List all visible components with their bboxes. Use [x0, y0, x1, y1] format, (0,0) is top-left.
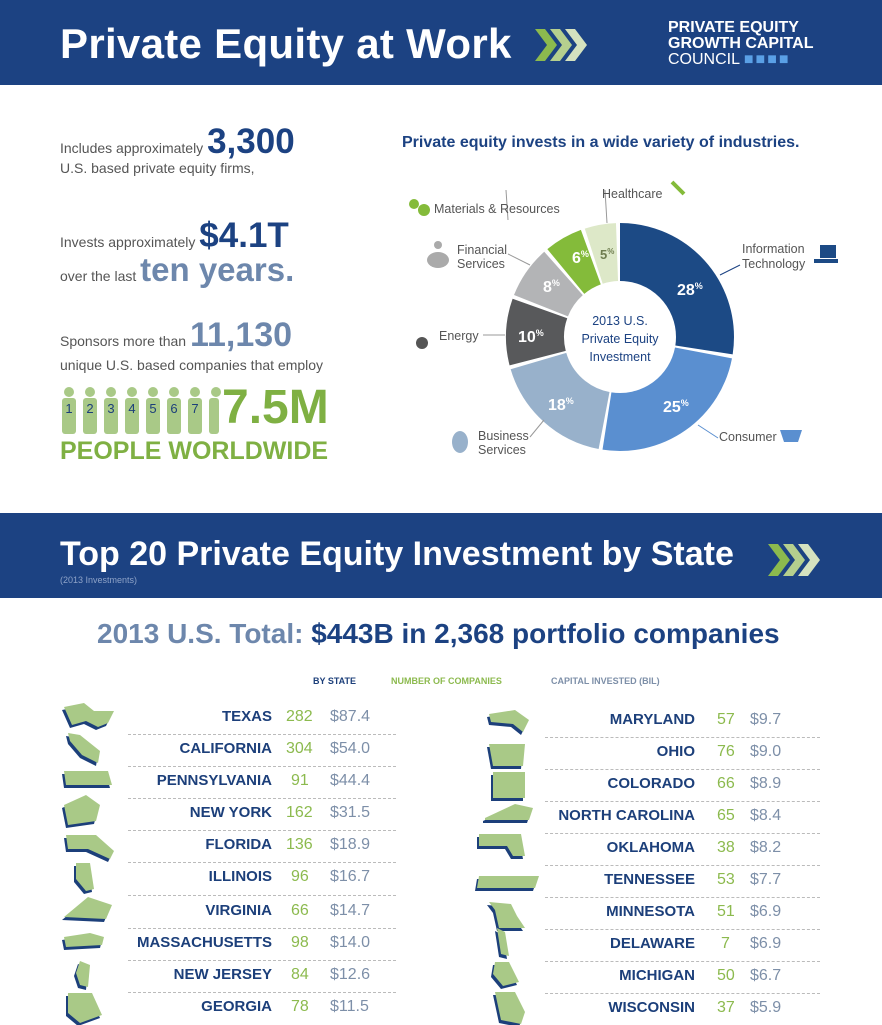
table right: $7.7: [750, 871, 781, 888]
donut chart: 18: [548, 397, 566, 414]
donut chart: Information: [742, 242, 805, 256]
table right: TENNESSEE: [604, 871, 695, 888]
table left: [128, 708, 396, 1015]
donut chart: %: [536, 328, 544, 338]
donut chart: [409, 180, 838, 457]
donut chart: Private Equity: [581, 332, 659, 346]
table left: VIRGINIA: [205, 902, 272, 919]
icon: people row: 4: [128, 401, 136, 416]
text: people worldwide: PEOPLE WORLDWIDE: [60, 437, 328, 465]
table left: MASSACHUSETTS: [137, 934, 272, 951]
table left: NEW YORK: [190, 804, 272, 821]
donut chart: 25: [663, 399, 681, 416]
table right: 51: [717, 903, 735, 920]
table right: $9.7: [750, 711, 781, 728]
stat: 7.5M: 7.5M: [222, 381, 329, 434]
title: Private Equity at Work: [60, 20, 512, 67]
table right: MARYLAND: [610, 711, 695, 728]
table left: 98: [291, 934, 309, 951]
table left: 96: [291, 868, 309, 885]
stat: firms: Includes approximately 3,300: [60, 122, 295, 161]
table left: 84: [291, 966, 309, 983]
table left: 91: [291, 772, 309, 789]
table right: NORTH CAROLINA: [558, 807, 695, 824]
column headers: BY STATE: [313, 676, 356, 686]
table right: $8.2: [750, 839, 781, 856]
donut chart: Financial: [457, 243, 507, 257]
column headers: CAPITAL INVESTED (BIL): [551, 676, 660, 686]
donut chart: 10: [518, 329, 536, 346]
table left: PENNSYLVANIA: [157, 772, 272, 789]
donut chart: Healthcare: [602, 187, 662, 201]
table left: ILLINOIS: [209, 868, 272, 885]
donut chart: 28: [677, 282, 695, 299]
table left: TEXAS: [222, 708, 272, 725]
table right: 53: [717, 871, 735, 888]
icon: chevrons: [535, 29, 587, 61]
donut chart: Services: [457, 257, 505, 271]
stat: firms: U.S. based private equity firms,: [60, 160, 255, 176]
subtitle: (2013 Investments): [60, 575, 137, 585]
donut chart: 5: [600, 247, 607, 262]
icon: people row: 6: [170, 401, 178, 416]
logo: GROWTH CAPITAL: [668, 35, 813, 52]
donut chart: %: [552, 278, 560, 288]
table right: WISCONSIN: [608, 999, 695, 1016]
donut chart: %: [581, 249, 589, 259]
table right: $6.9: [750, 903, 781, 920]
table right: $8.4: [750, 807, 781, 824]
column headers: [313, 676, 660, 686]
table right: 76: [717, 743, 735, 760]
table right: OKLAHOMA: [607, 839, 695, 856]
table right: DELAWARE: [610, 935, 695, 952]
table right: 50: [717, 967, 735, 984]
donut chart: Technology: [742, 257, 806, 271]
chart heading: Private equity invests in a wide variety of industries.: [402, 134, 799, 151]
logo: [668, 19, 814, 68]
table left: $87.4: [330, 708, 370, 725]
icon: people row: 2: [86, 401, 94, 416]
table left: CALIFORNIA: [180, 740, 272, 757]
donut chart: %: [695, 281, 703, 291]
donut chart: Consumer: [719, 430, 777, 444]
table left: 136: [286, 836, 313, 853]
table right: 66: [717, 775, 735, 792]
table left: 66: [291, 902, 309, 919]
table left: $18.9: [330, 836, 370, 853]
stat: companies: unique U.S. based companies that employ: [60, 357, 323, 373]
table right: $6.9: [750, 935, 781, 952]
state icons left: [62, 703, 114, 1025]
table right: OHIO: [657, 743, 695, 760]
table right: 65: [717, 807, 735, 824]
stat: companies: [60, 316, 323, 373]
icon: people row: 5: [149, 401, 157, 416]
donut chart: Investment: [589, 350, 651, 364]
table left: 162: [286, 804, 313, 821]
table left: $31.5: [330, 804, 370, 821]
table left: 282: [286, 708, 313, 725]
donut chart: 6: [572, 250, 581, 267]
table left: NEW JERSEY: [174, 966, 272, 983]
table right: $8.9: [750, 775, 781, 792]
table left: $44.4: [330, 772, 370, 789]
icon: chevrons: [768, 544, 820, 576]
total heading: 2013 U.S. Total: $443B in 2,368 portfolio companies: [97, 618, 780, 649]
donut chart: %: [681, 398, 689, 408]
table left: $12.6: [330, 966, 370, 983]
donut chart: %: [566, 396, 574, 406]
donut chart: 8: [543, 279, 552, 296]
table right: MINNESOTA: [606, 903, 695, 920]
table right: MICHIGAN: [619, 967, 695, 984]
table right: $6.7: [750, 967, 781, 984]
table left: $11.5: [330, 998, 369, 1015]
donut chart: Materials & Resources: [434, 202, 560, 216]
section title: Top 20 Private Equity Investment by State: [60, 535, 734, 573]
icon: people row: 3: [107, 401, 115, 416]
stat: invested: [60, 216, 294, 288]
table left: 304: [286, 740, 313, 757]
donut chart: Services: [478, 443, 526, 457]
table right: 38: [717, 839, 735, 856]
table right: 7: [721, 935, 730, 952]
table left: $54.0: [330, 740, 370, 757]
state icons right: [475, 710, 539, 1025]
table left: $16.7: [330, 868, 370, 885]
icon: people row: [62, 387, 221, 434]
stat: companies: Sponsors more than 11,130: [60, 316, 292, 354]
donut chart: %: [607, 247, 614, 256]
table right: 57: [717, 711, 735, 728]
column headers: NUMBER OF COMPANIES: [391, 676, 502, 686]
section band: top 20: [0, 513, 882, 598]
stat: invested: Invests approximately $4.1T: [60, 216, 289, 255]
table right: $9.0: [750, 743, 781, 760]
donut chart: Business: [478, 429, 529, 443]
donut chart: Energy: [439, 329, 479, 343]
table left: FLORIDA: [205, 836, 272, 853]
table left: $14.0: [330, 934, 370, 951]
table left: 78: [291, 998, 309, 1015]
table right: $5.9: [750, 999, 781, 1016]
table right: COLORADO: [608, 775, 695, 792]
table left: GEORGIA: [201, 998, 272, 1015]
donut chart: 2013 U.S.: [592, 314, 648, 328]
icon: people row: 1: [65, 401, 73, 416]
icon: people row: 7: [191, 401, 199, 416]
header band: [0, 0, 882, 85]
table left: $14.7: [330, 902, 370, 919]
table right: [545, 711, 820, 1016]
logo: COUNCIL ■■■■: [668, 51, 791, 68]
table right: 37: [717, 999, 735, 1016]
stat: invested: over the last ten years.: [60, 251, 294, 288]
logo: PRIVATE EQUITY: [668, 19, 799, 36]
